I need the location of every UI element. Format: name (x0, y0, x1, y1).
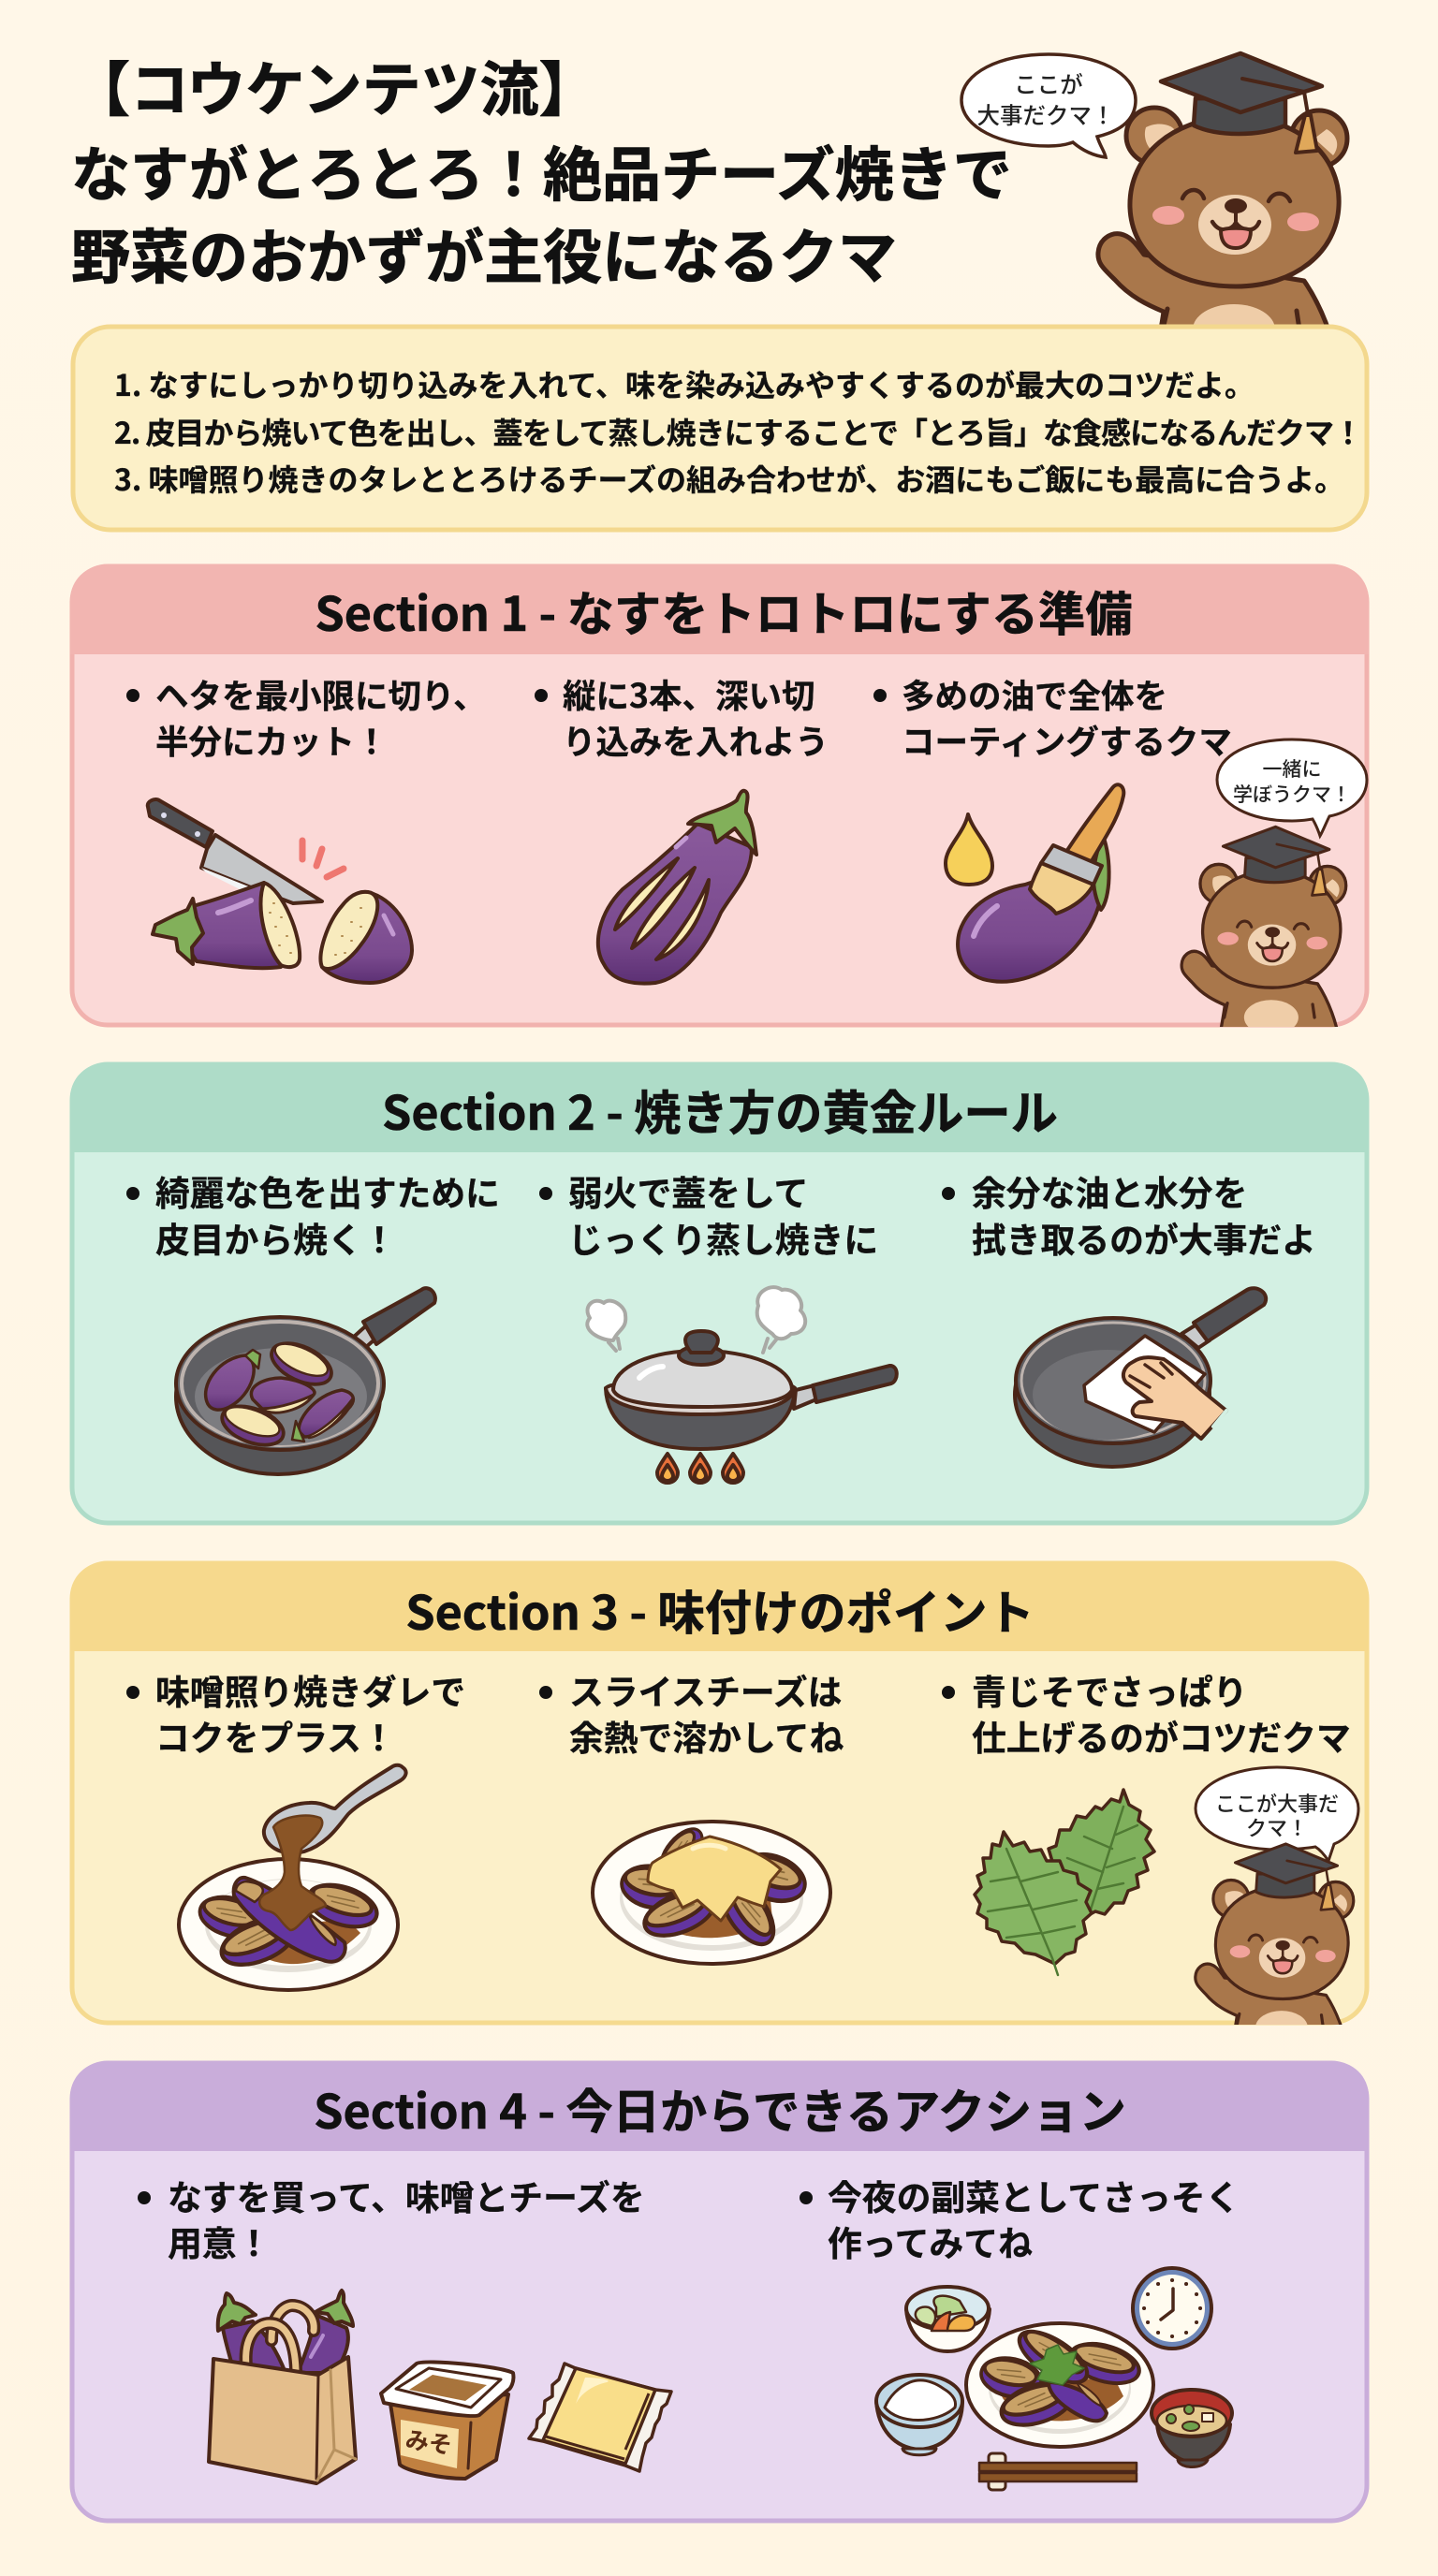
icon: oil drop (946, 814, 992, 885)
bullet: slits: り込みを入れよう (563, 716, 829, 764)
section 3 header band (70, 1561, 1369, 1651)
section 3 heading: Section 3 - 味付けのポイント (405, 1576, 1034, 1644)
icon: plate with melted cheese (593, 1822, 830, 1964)
bullet: wipe: 拭き取るのが大事だよ (972, 1212, 1316, 1263)
icon: eggplant with slits (598, 791, 756, 984)
icon: shiso leaves (975, 1790, 1154, 1975)
section 4 heading: Section 4 - 今日からできるアクション (314, 2075, 1126, 2143)
section 1 heading: Section 1 - なすをトロトロにする準備 (315, 578, 1133, 645)
bullet: skin first: 皮目から焼く！ (155, 1212, 397, 1263)
icon: dinner table set (876, 2268, 1232, 2490)
bullet: skin first: 綺麗な色を出すために (155, 1165, 500, 1216)
bear mascot: section 1 (1181, 827, 1346, 1048)
bullet: cook tonight (800, 2170, 1240, 2266)
speech bubble: section 3 (1196, 1767, 1358, 1861)
bullet: heta: ヘタを最小限に切り、 (155, 670, 487, 718)
bullet: cook tonight: 今夜の副菜としてさっそく (828, 2170, 1240, 2220)
bullet: slits (535, 670, 829, 764)
bullet: oil: コーティングするクマ (902, 716, 1232, 764)
summary card: 2. 皮目から焼いて色を出し、蓋をして蒸し焼きにすることで「とろ旨」な食感になるんだクマ！ (114, 410, 1363, 453)
bullet: miso sauce: コクをプラス！ (155, 1710, 396, 1761)
icon: cheese pack (529, 2364, 671, 2471)
bullet: heta: 半分にカット！ (155, 716, 389, 764)
section 2 header band (70, 1062, 1369, 1152)
bullet: oil (873, 670, 1232, 764)
icon: knife cutting eggplant (148, 799, 412, 983)
icon: miso tub (381, 2362, 513, 2479)
icon: covered pan on flame (587, 1287, 897, 1483)
summary card (73, 327, 1367, 530)
icon: miso tub: みそ (404, 2422, 455, 2461)
speech bubble: top: 大事だクマ！ (977, 98, 1114, 131)
icon: wiping pan with towel (1015, 1288, 1266, 1467)
panel: section 4 (70, 2061, 1369, 2521)
bullet: steam: 弱火で蓋をして (568, 1165, 808, 1216)
icon: brush on eggplant (958, 784, 1123, 982)
bullet: slits: 縦に3本、深い切 (563, 670, 814, 718)
bullet: shiso: 青じそでさっぱり (972, 1664, 1247, 1715)
bullet: cook tonight: 作ってみてね (828, 2216, 1033, 2266)
title: 【コウケンテツ流】 (71, 58, 598, 124)
bullet: miso sauce: 味噌照り焼きダレで (155, 1664, 465, 1715)
section 1 header band (70, 564, 1369, 654)
bullet: cheese (539, 1664, 844, 1761)
title: 野菜のおかずが主役になるクマ (71, 226, 897, 291)
speech bubble: top: ここが (1014, 67, 1083, 100)
speech bubble: top (961, 54, 1136, 157)
bullet: oil: 多めの油で全体を (902, 670, 1167, 718)
summary card: 1. なすにしっかり切り込みを入れて、味を染み込みやすくするのが最大のコツだよ。 (114, 362, 1255, 405)
bullet: buy: なすを買って、味噌とチーズを (168, 2170, 645, 2220)
bullet: steam: じっくり蒸し焼きに (568, 1212, 878, 1263)
speech bubble: section 1: 一緒に (1262, 754, 1322, 783)
icon: pan with eggplants (176, 1288, 435, 1474)
icon: shopping bag with eggplants (209, 2291, 356, 2483)
bullet: heta (126, 670, 487, 764)
panel: section 2 (70, 1062, 1369, 1523)
bullet: skin first (126, 1165, 500, 1263)
bullet: wipe (942, 1165, 1316, 1263)
title: なすがとろとろ！絶品チーズ焼きで (71, 143, 1012, 209)
section 4 header band (70, 2061, 1369, 2151)
bear mascot: top (1098, 53, 1347, 374)
speech bubble: section 3: ここが大事だ (1215, 1788, 1339, 1818)
speech bubble: section 3: クマ！ (1246, 1812, 1308, 1842)
bullet: wipe: 余分な油と水分を (972, 1165, 1247, 1216)
speech bubble: section 1: 学ぼうクマ！ (1233, 780, 1351, 808)
bullet: shiso: 仕上げるのがコツだクマ (972, 1710, 1351, 1761)
bullet: cheese: スライスチーズは (569, 1664, 842, 1715)
speech bubble: section 1 (1217, 739, 1367, 836)
title (71, 58, 1012, 291)
summary card: 3. 味噌照り焼きのタレととろけるチーズの組み合わせが、お酒にもご飯にも最高に合うよ。 (114, 457, 1344, 500)
bullet: steam (539, 1165, 878, 1263)
bullet: buy: 用意！ (168, 2216, 271, 2266)
bear mascot: section 3 (1194, 1842, 1356, 2025)
panel: section 3 (70, 1561, 1369, 2057)
bullet: miso sauce (126, 1664, 465, 1761)
bullet: cheese: 余熱で溶かしてね (569, 1710, 844, 1761)
bullet: buy (138, 2170, 645, 2266)
panel: section 1 (70, 564, 1369, 1048)
icon: plate with miso sauce (179, 1765, 406, 1990)
section 2 heading: Section 2 - 焼き方の黄金ルール (382, 1076, 1058, 1144)
bullet: shiso (942, 1664, 1351, 1761)
